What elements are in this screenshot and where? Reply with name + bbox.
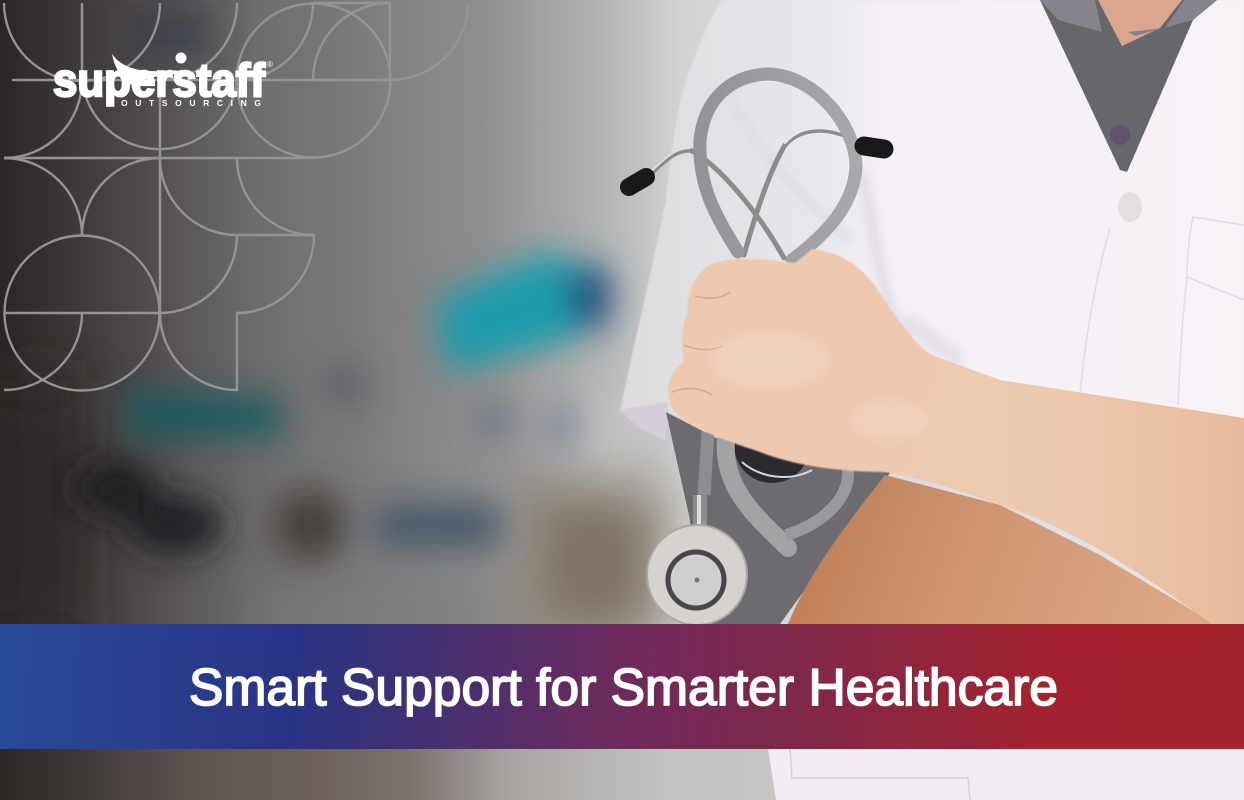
neck skin	[1098, 0, 1182, 46]
lower tubing and chest piece	[647, 407, 848, 625]
blurred floor strip below banner	[0, 748, 1244, 800]
grey scrub shirt at collar	[1040, 0, 1217, 172]
hand holding stethoscope	[668, 249, 935, 472]
white coat	[618, 0, 1244, 441]
forearm	[885, 345, 1244, 624]
logo: superstaff outsourcing	[53, 52, 273, 108]
banner title: Smart Support for Smarter Healthcare	[189, 659, 1058, 717]
metal ear tubes	[648, 130, 858, 258]
lower coat below banner	[768, 748, 1244, 800]
logo subline: OUTSOURCING	[121, 98, 261, 108]
logo swoosh	[112, 54, 188, 85]
blurred clinic background	[0, 0, 1244, 640]
registered mark: ®	[267, 60, 273, 69]
photo: doctor in white coat	[618, 0, 1244, 625]
title banner	[0, 624, 1244, 749]
stethoscope upper tubing	[648, 74, 858, 260]
shirt button	[1110, 125, 1130, 145]
geometric line pattern	[4, 3, 468, 390]
ear tips	[629, 146, 884, 187]
logo wordmark: superstaff	[53, 54, 266, 106]
grey shirt sleeve	[666, 412, 892, 624]
upper arm	[788, 475, 1215, 624]
coat button	[1118, 192, 1142, 222]
logo figure head	[176, 52, 186, 64]
